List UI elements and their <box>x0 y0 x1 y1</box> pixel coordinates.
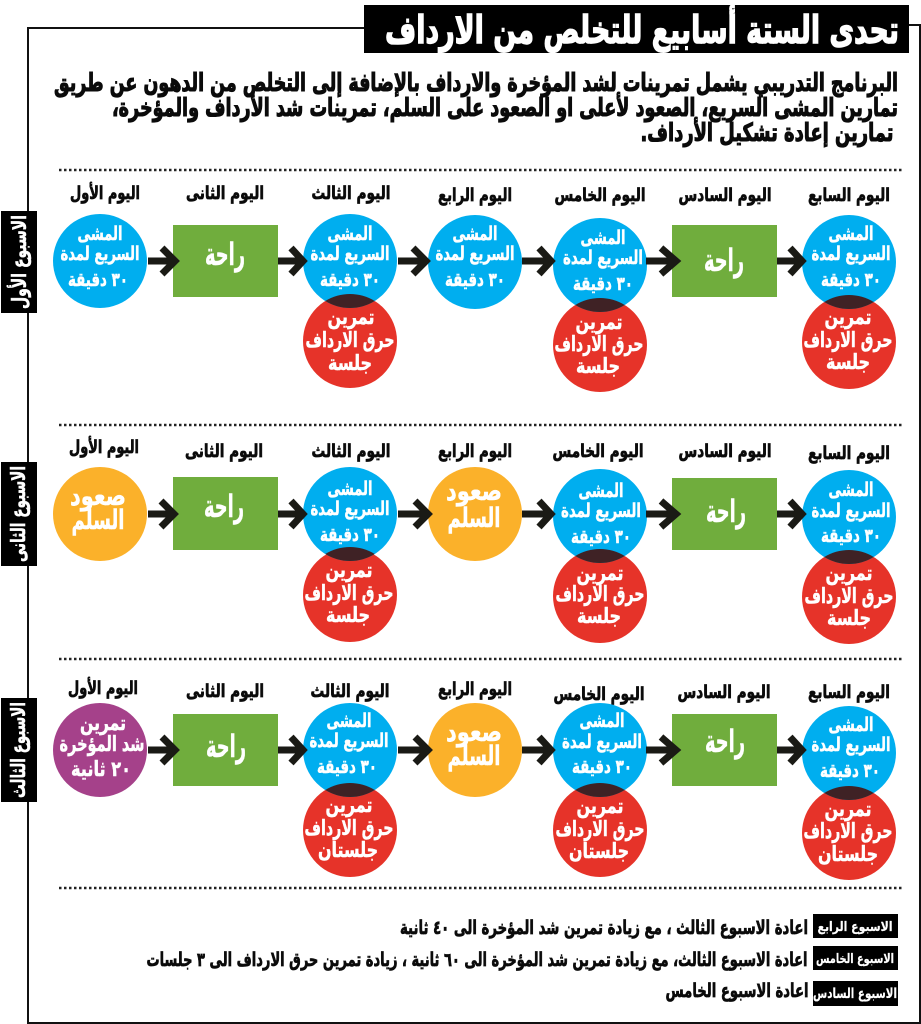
day 2 rest <box>173 714 278 786</box>
day 2 rest: راحة <box>205 237 245 273</box>
day 5 walk and burn: السريع لمدة <box>561 500 641 522</box>
day 3 walk and burn <box>303 214 397 388</box>
week 2 day labels: اليوم الأول <box>69 436 139 458</box>
day 5 walk and burn: جلستان <box>569 839 629 863</box>
day 6 rest: راحة <box>704 243 744 279</box>
day 1 glute <box>53 703 147 797</box>
day 1 walk: المشى <box>78 223 122 245</box>
day 3 walk and burn: جلسة <box>328 351 372 375</box>
day 6 rest: راحة <box>705 724 745 760</box>
day 1 glute: ٢٠ ثانية <box>71 757 131 781</box>
day 5 walk and burn: المشى <box>580 227 626 249</box>
week 3 day labels: اليوم الأول <box>68 677 138 699</box>
week 1 tab <box>1 211 37 313</box>
day 3 walk and burn <box>303 467 397 642</box>
week 3 day labels <box>68 677 890 705</box>
panel: week 3 <box>1 677 896 880</box>
day 7 walk and burn: تمرين <box>824 797 872 821</box>
day 6 rest <box>672 225 777 297</box>
day 1 stairs <box>53 467 147 561</box>
day 7 walk and burn: المشى <box>828 479 874 501</box>
intro text <box>54 68 898 148</box>
day 1 stairs: السلم <box>72 505 124 536</box>
week 1 day labels: اليوم الرابع <box>438 185 512 206</box>
day 3 walk and burn: حرق الارداف <box>306 328 394 352</box>
day 3 walk and burn: المشى <box>326 710 372 732</box>
day 7 walk and burn <box>802 706 896 880</box>
day 5 walk and burn: السريع لمدة <box>562 731 642 753</box>
day 3 walk and burn: السريع لمدة <box>310 243 390 265</box>
day 7 walk and burn: جلسة <box>827 606 871 630</box>
day 4 stairs <box>428 703 522 797</box>
day 7 walk and burn: ٣٠ دقيقة <box>820 760 880 782</box>
week 3 day labels: اليوم الثانى <box>186 681 264 702</box>
day 2 rest <box>173 477 278 550</box>
day 6 rest: راحة <box>706 494 746 530</box>
week 2 tab <box>1 462 37 566</box>
panel: week 2 <box>1 436 896 644</box>
day 5 walk and burn: ٣٠ دقيقة <box>572 756 632 778</box>
day 4 stairs: صعود <box>446 476 502 507</box>
day 4 walk: ٣٠ دقيقة <box>445 269 505 291</box>
day 5 walk and burn: المشى <box>580 710 624 732</box>
day 2 rest: راحة <box>204 489 244 525</box>
day 1 glute: شد المؤخرة <box>60 732 144 756</box>
day 5 walk and burn: تمرين <box>576 794 624 818</box>
week 1 arrows <box>148 248 802 274</box>
day 5 walk and burn: حرق الارداف <box>556 582 644 606</box>
week 3 arrows <box>148 737 802 763</box>
day 3 walk and burn: تمرين <box>326 558 372 582</box>
week 3 day labels: اليوم السابع <box>808 682 890 703</box>
day 6 rest <box>672 478 777 550</box>
day 3 walk and burn: ٣٠ دقيقة <box>320 269 380 291</box>
day 5 walk and burn <box>553 218 647 392</box>
day 5 walk and burn: جلسة <box>576 354 620 378</box>
day 5 walk and burn <box>553 469 647 643</box>
day 5 walk and burn: تمرين <box>576 561 624 585</box>
day 5 walk and burn <box>553 703 647 877</box>
week 2 day labels: اليوم السابع <box>808 443 890 464</box>
panel: week 1 <box>1 182 896 392</box>
day 7 walk and burn: تمرين <box>824 305 872 329</box>
day 1 stairs: صعود <box>70 481 126 512</box>
week 3 day labels: اليوم الثالث <box>310 681 390 702</box>
week 1 day labels: اليوم السادس <box>678 185 772 206</box>
week 1 tab: الاسبوع الأول <box>6 215 31 309</box>
day 4 walk: المشى <box>452 223 498 245</box>
day 4 stairs: السلم <box>448 503 500 534</box>
week 3 tab: الاسبوع الثالث <box>6 702 30 798</box>
week 5 note: الاسبوع الخامس <box>816 952 894 967</box>
day 4 walk: السريع لمدة <box>436 243 514 265</box>
week 3 day labels: اليوم الرابع <box>438 679 512 700</box>
week 1 day labels: اليوم السابع <box>808 185 890 206</box>
week 2 day labels: اليوم الثانى <box>185 441 263 462</box>
week 2 tab: الاسبوع الثانى <box>6 466 30 562</box>
day 3 walk and burn: المشى <box>328 223 372 245</box>
week 4 note: الاسبوع الرابع <box>818 920 892 935</box>
week 3 tab <box>1 698 37 802</box>
day 6 rest <box>672 714 777 786</box>
day 5 walk and burn: ٣٠ دقيقة <box>573 273 633 295</box>
day 3 walk and burn: حرق الارداف <box>304 581 394 605</box>
week 1 day labels: اليوم الثانى <box>186 183 264 204</box>
week 6 note: اعادة الاسبوع الخامس <box>666 980 808 1002</box>
day 5 walk and burn: ٣٠ دقيقة <box>571 526 631 548</box>
week 2 day labels: اليوم الثالث <box>312 441 390 462</box>
day 4 stairs <box>428 467 522 561</box>
day 5 walk and burn: حرق الارداف <box>556 817 644 841</box>
week 2 day labels <box>69 436 890 464</box>
week 3 day labels: اليوم الخامس <box>554 684 644 705</box>
week 2 arrows <box>148 501 802 527</box>
day 3 walk and burn: المشى <box>328 478 372 500</box>
day 5 walk and burn: حرق الارداف <box>554 332 644 356</box>
day 3 walk and burn: ٣٠ دقيقة <box>320 524 380 546</box>
week 2 day labels: اليوم السادس <box>678 441 772 462</box>
day 7 walk and burn: جلسة <box>826 350 870 374</box>
day 3 walk and burn: ٣٠ دقيقة <box>317 756 377 778</box>
day 3 walk and burn: حرق الارداف <box>304 816 394 840</box>
week 2 day labels: اليوم الرابع <box>438 441 512 462</box>
day 5 walk and burn: المشى <box>578 480 624 502</box>
day 4 stairs: صعود <box>446 717 502 748</box>
day 7 walk and burn <box>802 470 896 644</box>
day 7 walk and burn: المشى <box>828 714 874 736</box>
week 1 day labels: اليوم الأول <box>70 182 140 204</box>
panel: weeks 4 to 6 notes <box>147 914 898 1006</box>
day 2 rest <box>173 225 278 297</box>
day 1 walk <box>53 214 147 308</box>
day 7 walk and burn: ٣٠ دقيقة <box>821 525 881 547</box>
day 1 walk: السريع لمدة <box>60 243 140 265</box>
day 2 rest: راحة <box>206 729 246 765</box>
day 7 walk and burn: المشى <box>828 223 874 245</box>
day 1 glute: تمرين <box>80 711 126 735</box>
week 3 day labels: اليوم السادس <box>678 682 770 703</box>
week 1 day labels: اليوم الثالث <box>312 183 390 204</box>
week 2 day labels: اليوم الخامس <box>552 441 644 462</box>
day 3 walk and burn <box>303 703 397 877</box>
day 7 walk and burn: تمرين <box>826 561 872 585</box>
day 3 walk and burn: السريع لمدة <box>310 730 388 752</box>
day 5 walk and burn: السريع لمدة <box>563 247 643 269</box>
day 4 stairs: السلم <box>448 741 500 772</box>
day 3 walk and burn: السريع لمدة <box>310 498 390 520</box>
day 3 walk and burn: جلسة <box>326 603 370 627</box>
day 7 walk and burn: ٣٠ دقيقة <box>821 269 881 291</box>
day 5 walk and burn: تمرين <box>576 310 622 334</box>
week 1 day labels: اليوم الخامس <box>554 185 646 206</box>
day 7 walk and burn <box>802 215 896 389</box>
day 3 walk and burn: تمرين <box>326 793 372 817</box>
day 7 walk and burn: جلستان <box>818 842 878 866</box>
day 3 walk and burn: تمرين <box>328 305 374 329</box>
day 5 walk and burn: جلسة <box>577 604 621 628</box>
week 1 day labels <box>70 182 890 206</box>
day 3 walk and burn: جلستان <box>318 838 378 862</box>
day 4 walk <box>428 215 522 309</box>
day 1 walk: ٣٠ دقيقة <box>68 269 128 291</box>
